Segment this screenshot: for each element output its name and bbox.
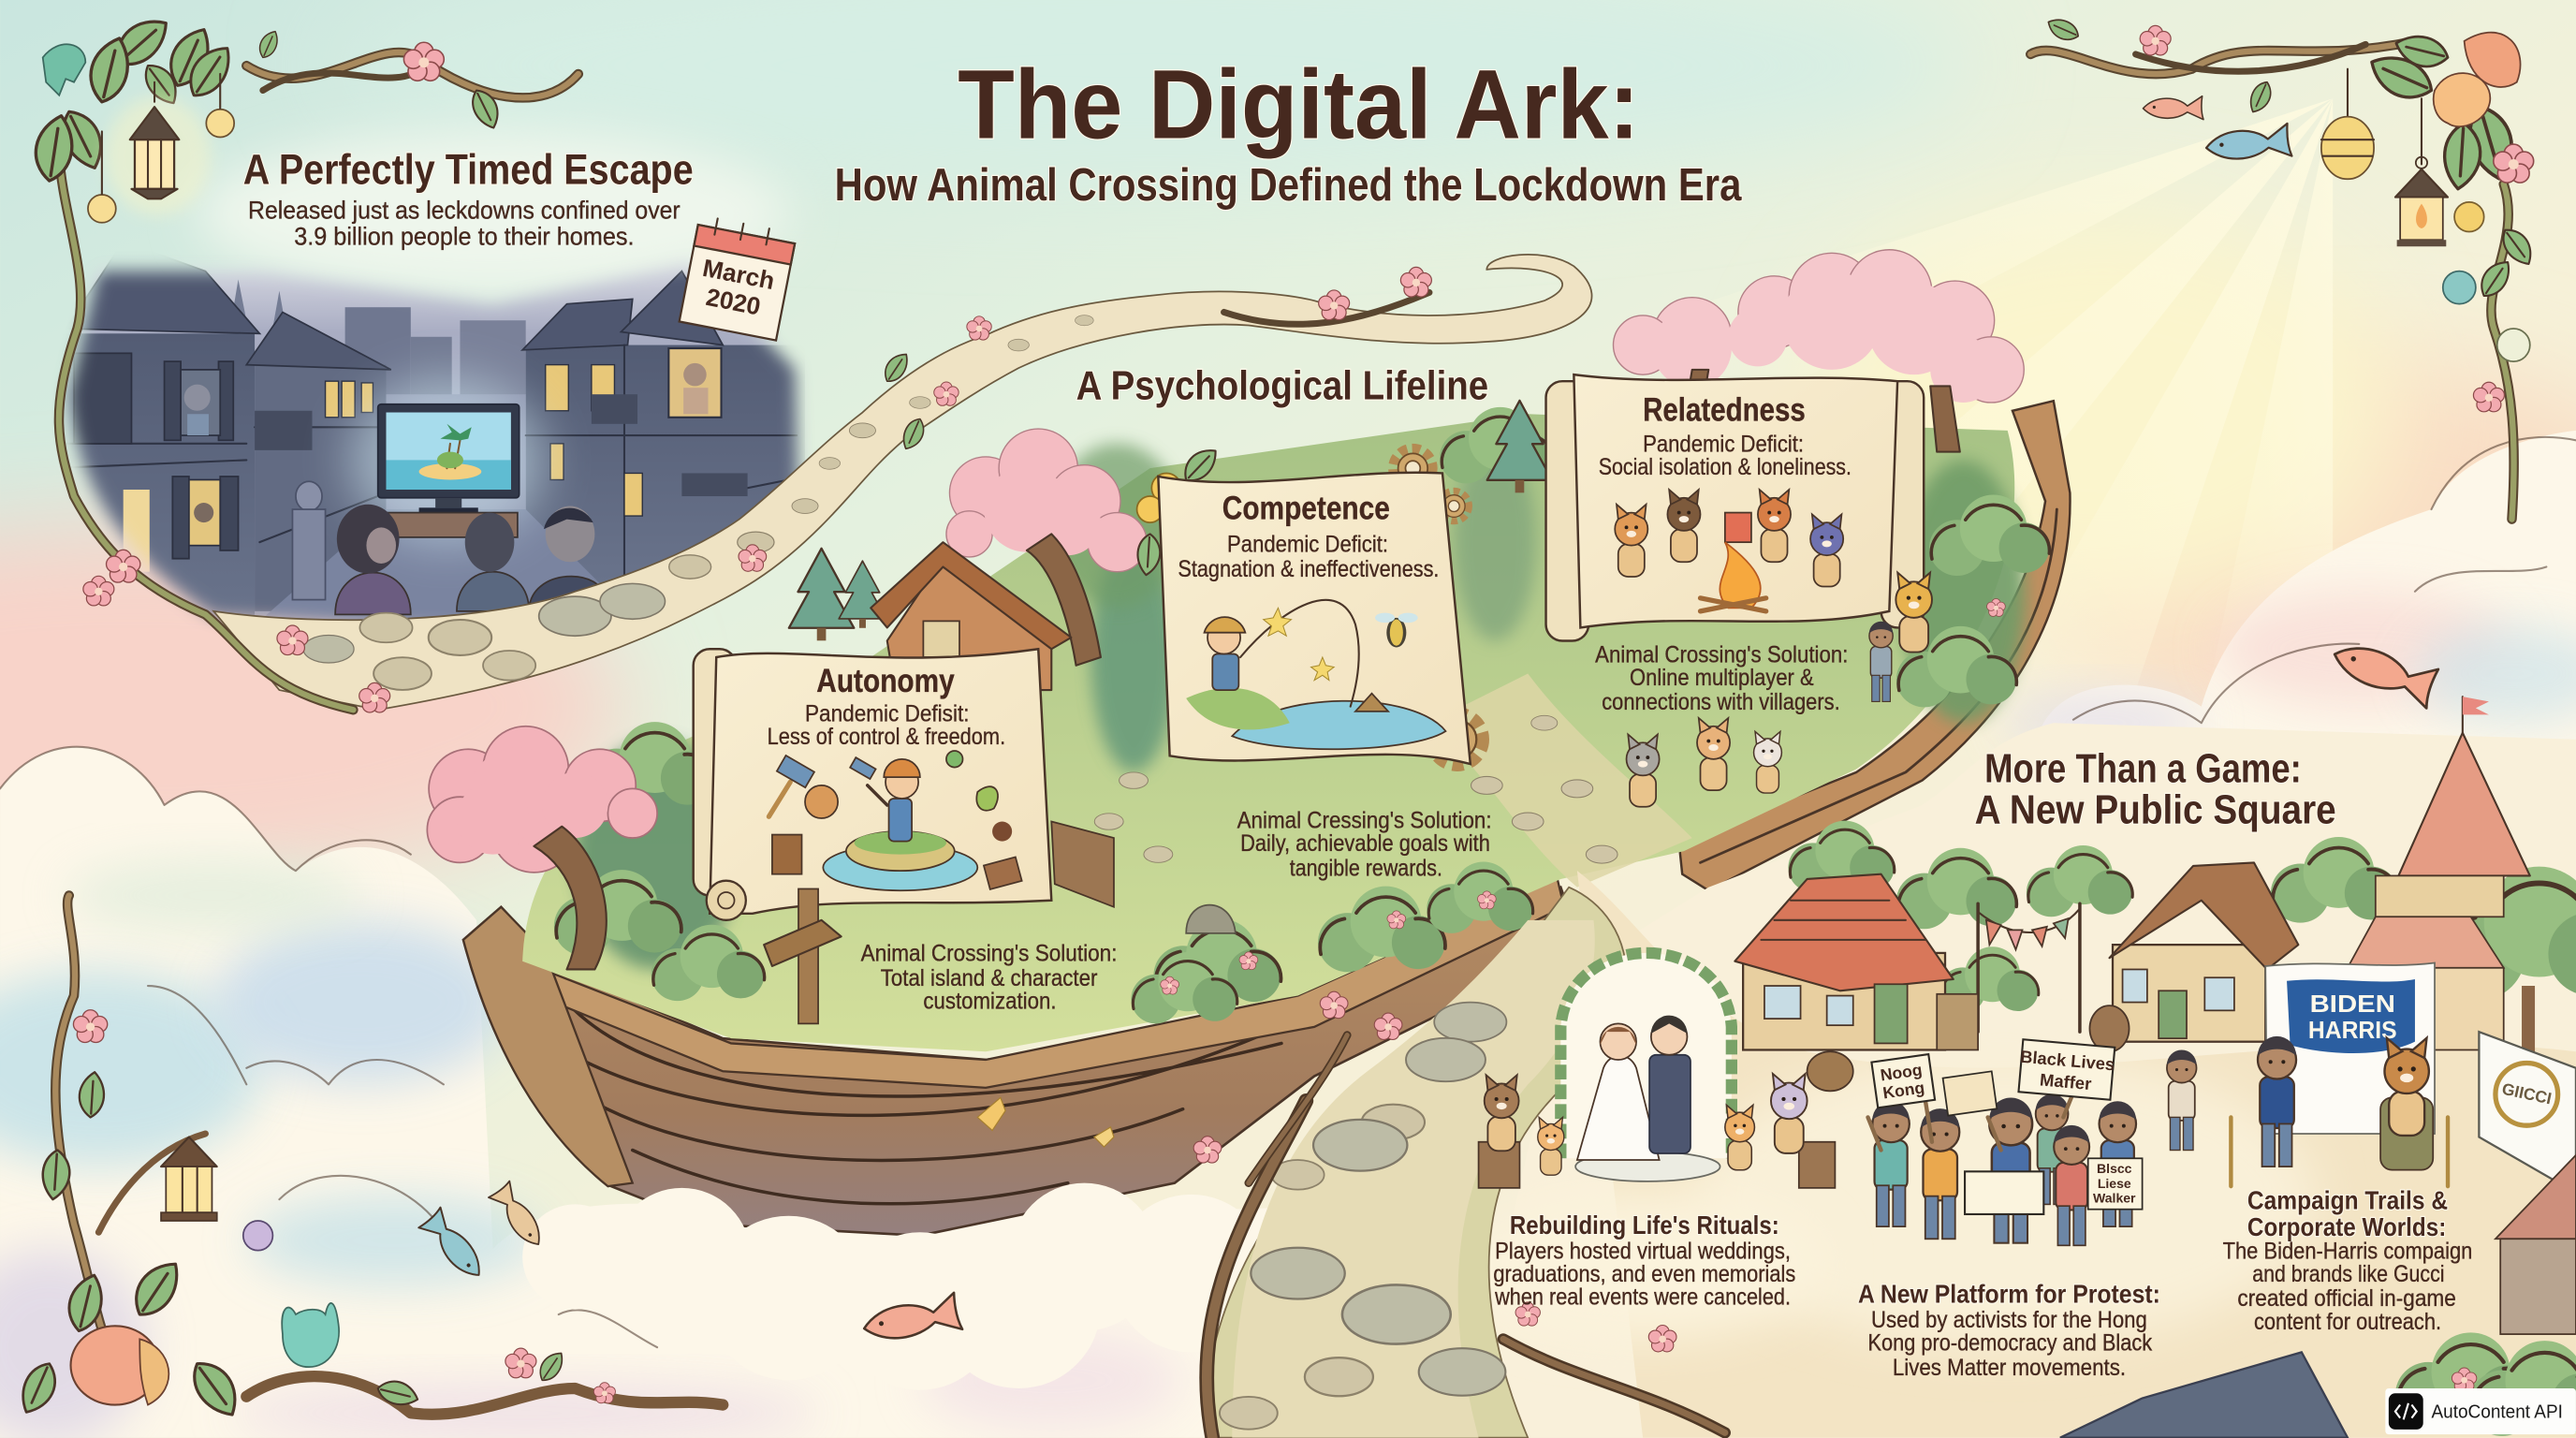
cherry tree at the bow: [427, 726, 657, 969]
sign: blank: [1965, 1171, 2043, 1214]
text: a perfectly timed escape: Released just as leckdowns confined over: [248, 195, 681, 224]
text: competence solution: Daily, achievable goals with: [1240, 831, 1490, 857]
bear figure in camouflage: [2380, 1038, 2433, 1170]
icon: calendar march 2020: 2020: [704, 283, 763, 321]
text: rebuilding rituals: [1493, 1211, 1795, 1310]
text: protest: [1858, 1280, 2160, 1381]
old villager: [2167, 1049, 2197, 1151]
bottom right buildings: [2060, 1155, 2576, 1438]
icon: calendar march 2020: [680, 215, 797, 341]
scroll: relatedness: Social isolation & loneliness.: [1599, 455, 1852, 480]
text: relatedness solution: Online multiplayer &: [1630, 666, 1814, 691]
barrels and shop sign: [1808, 994, 2130, 1091]
politician figure: [2258, 1036, 2296, 1167]
people watching: [292, 481, 605, 614]
watermark: autocontent api: AutoContent API: [2431, 1402, 2563, 1423]
text: campaign: content for outreach.: [2254, 1310, 2441, 1335]
cloud puffs over hull: [522, 1183, 1270, 1390]
text: relatedness solution: [1595, 642, 1848, 715]
biden harris banner: BIDEN: [2310, 990, 2395, 1018]
clouds: lower left: [0, 747, 1314, 1438]
scroll: relatedness: Pandemic Deficit:: [1643, 433, 1804, 458]
scroll: autonomy: Less of control & freedom.: [768, 725, 1005, 750]
text: campaign: created official in-game: [2237, 1286, 2456, 1312]
sign: hong kong: Kong: [1881, 1078, 1925, 1103]
text: rebuilding rituals: graduations, and even memorials: [1493, 1262, 1795, 1287]
text: relatedness solution: connections with villagers.: [1602, 690, 1840, 715]
ark deck: [522, 407, 2049, 1051]
sign: small: Blscc: [2097, 1161, 2132, 1176]
tower: [2348, 697, 2530, 1049]
icon: paper lantern: [2321, 69, 2374, 179]
icon: hanging lantern right: [2395, 98, 2448, 246]
section heading: more than a game: [1975, 745, 2336, 832]
sign: small: [2088, 1158, 2143, 1210]
autonomy illustration: island with villager and tools: [768, 751, 1022, 890]
scroll: relatedness: Relatedness: [1643, 391, 1806, 428]
text: a perfectly timed escape: 3.9 billion people to their homes.: [294, 221, 634, 250]
rebuilding rituals: wedding arch: [1479, 953, 1835, 1188]
villagers by the path: [1627, 718, 1781, 807]
text: a perfectly timed escape: A Perfectly Timed Escape: [243, 146, 694, 194]
sign: small: Liese: [2098, 1176, 2131, 1191]
signpost: [764, 888, 842, 1023]
text: protest: Used by activists for the Hong: [1871, 1308, 2147, 1333]
clouds: right: [2004, 431, 2576, 1019]
trees on deck: [789, 250, 2024, 765]
scroll: autonomy: Pandemic Defisit:: [805, 701, 970, 726]
house on deck: [871, 542, 1071, 690]
vine: top right frame: [2030, 13, 2538, 520]
text: campaign: The Biden-Harris compaign: [2223, 1239, 2472, 1264]
scroll: competence: [1158, 473, 1471, 764]
section heading: more than a game: A New Public Square: [1975, 786, 2336, 832]
title: [835, 50, 1742, 211]
text: relatedness solution: Animal Crossing's Solution:: [1595, 642, 1848, 668]
text: campaign: Campaign Trails &: [2247, 1186, 2448, 1215]
gucci sign: [2479, 1032, 2576, 1193]
gucci sign: GIICCI: [2500, 1079, 2554, 1108]
text: autonomy solution: Total island & character: [881, 966, 1097, 991]
sign: black lives matter: Black Lives: [2019, 1047, 2115, 1074]
text: autonomy solution: customization.: [923, 990, 1057, 1015]
sign: black lives matter: Maffer: [2039, 1069, 2092, 1093]
flower cluster on competence scroll: [1137, 473, 1188, 527]
text: competence solution: tangible rewards.: [1290, 856, 1442, 881]
text: rebuilding rituals: when real events were canceled.: [1494, 1284, 1791, 1310]
bunting: [1978, 903, 2080, 1032]
sign: hong kong: Noog: [1879, 1060, 1924, 1084]
text: a perfectly timed escape: [243, 146, 694, 250]
village ground: [1462, 723, 2576, 1438]
sign: hong kong: [1871, 1054, 1935, 1108]
text: competence solution: Animal Cressing's Solution:: [1237, 809, 1492, 834]
fish in clouds: [243, 634, 2440, 1346]
scroll: autonomy: [694, 649, 1051, 920]
text: protest: Kong pro-democracy and Black: [1868, 1331, 2153, 1357]
sign: black lives matter: [2017, 1039, 2116, 1100]
icon: pink fish top: [2143, 96, 2203, 120]
title: The Digital Ark:: [958, 50, 1640, 159]
icon: tv with island: [378, 404, 520, 537]
scroll: autonomy: Autonomy: [816, 663, 955, 699]
protest crowd: [1868, 1039, 2143, 1245]
text: campaign: and brands like Gucci: [2252, 1262, 2445, 1287]
text: campaign: [2223, 1186, 2472, 1335]
sun rays: [1643, 98, 2333, 788]
sign: map: [1943, 1071, 1997, 1116]
text: competence solution: [1237, 809, 1492, 881]
heading: a psychological lifeline: A Psychological Lifeline: [1076, 362, 1488, 408]
campaign scene: [2167, 962, 2576, 1193]
watermark: autocontent api: [2385, 1388, 2576, 1434]
text: protest: A New Platform for Protest:: [1858, 1280, 2160, 1309]
section heading: more than a game: More Than a Game:: [1984, 745, 2302, 791]
icon: blue fish: [2204, 124, 2291, 163]
biden harris banner: HARRIS: [2308, 1016, 2397, 1044]
scroll: competence: Stagnation & ineffectiveness.: [1178, 557, 1439, 582]
text: rebuilding rituals: Players hosted virtual weddings,: [1495, 1239, 1791, 1264]
lifeline road: [213, 255, 1592, 710]
text: campaign: Corporate Worlds:: [2247, 1212, 2446, 1241]
panel: lockdown city scene: [64, 257, 807, 627]
text: rebuilding rituals: Rebuilding Life's Rituals:: [1510, 1211, 1779, 1240]
text: autonomy solution: Animal Crossing's Solution:: [861, 942, 1117, 967]
title: How Animal Crossing Defined the Lockdown Era: [835, 160, 1742, 211]
relatedness illustration: villagers and campfire: [1615, 490, 1843, 611]
village buildings: [1734, 697, 2576, 1091]
vine: bottom left frame: [12, 895, 723, 1424]
house: orange roof: [1734, 874, 1954, 1049]
vine: top left frame: [29, 10, 578, 712]
competence illustration: fishing villager: [1186, 600, 1445, 749]
text: autonomy solution: [861, 942, 1117, 1015]
stone path down the hill: [1193, 888, 1725, 1438]
icon: hanging lantern: [88, 74, 234, 223]
text: protest: Lives Matter movements.: [1893, 1356, 2126, 1381]
scroll: competence: Competence: [1222, 491, 1390, 527]
scroll: competence: Pandemic Deficit:: [1227, 533, 1388, 558]
house: brown roof: [2110, 862, 2298, 1042]
character on ladder by ark: [1869, 573, 1932, 701]
icon: bottom lantern: [161, 1137, 217, 1221]
scroll: relatedness: [1546, 374, 1924, 640]
biden harris banner: [2265, 962, 2435, 1134]
sign: small: Walker: [2093, 1191, 2136, 1206]
icon: calendar march 2020: March: [700, 254, 777, 295]
ark hull: [463, 401, 2071, 1236]
